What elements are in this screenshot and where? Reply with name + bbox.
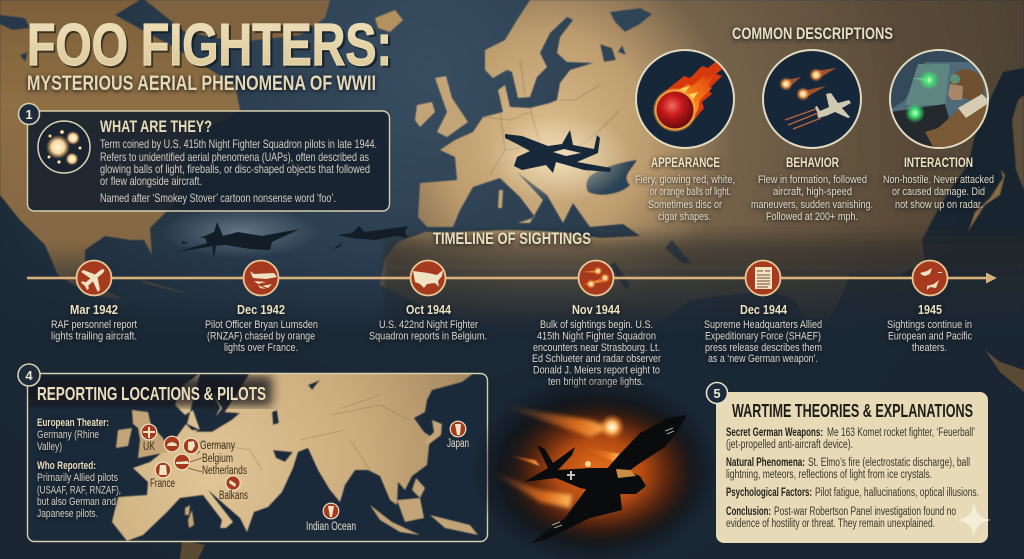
theories text: (jet-propelled anti-aircraft device). — [726, 439, 853, 451]
Mar 1942 event: lights trailing aircraft. — [51, 330, 137, 342]
interaction text: or caused damage. Did — [892, 186, 985, 198]
icon: plane — [76, 260, 112, 296]
title: FOO FIGHTERS: — [28, 14, 394, 80]
Oct 1944 event: Squadron reports in Belgium. — [369, 330, 487, 342]
map labels — [143, 438, 469, 533]
theories text: Conclusion: — [726, 506, 771, 518]
badge 1: 1 — [25, 107, 33, 122]
side text: Japanese pilots. — [37, 508, 98, 520]
subtitle: MYSTERIOUS AERIAL PHENOMENA OF WWII — [27, 71, 376, 95]
map labels: Belgium — [202, 453, 233, 465]
Nov 1944 event: ten bright orange lights. — [548, 376, 644, 388]
descriptions text — [635, 155, 994, 223]
theories text: Natural Phenomena: — [726, 457, 805, 469]
side text: European Theater: — [37, 417, 109, 429]
theories text: Post-war Robertson Panel investigation found no — [774, 506, 956, 518]
behavior text: BEHAVIOR — [786, 155, 839, 170]
Dec 1944 event: Dec 1944 — [740, 302, 788, 317]
map leader lines — [188, 451, 202, 472]
icon: press release — [755, 267, 772, 289]
body text: Refers to unidentified aerial phenomena (UAPs), often described as — [100, 151, 369, 164]
Dec 1944 event: press release describes them — [705, 342, 822, 354]
Dec 1942 event: (RNZAF) chased by orange — [207, 330, 315, 342]
map labels: UK — [143, 441, 155, 453]
theories text: lightning, meteors, reflections of light from ice crystals. — [726, 469, 932, 481]
body text: or flew alongside aircraft. — [100, 175, 202, 188]
interaction text: INTERACTION — [904, 155, 973, 170]
Nov 1944 event: Bulk of sightings begin. U.S. — [540, 319, 653, 331]
body text: Term coined by U.S. 415th Night Fighter Squadron pilots in late 1944. — [100, 138, 377, 151]
1945 event: 1945 — [918, 302, 942, 317]
map labels: Japan — [447, 438, 469, 450]
body text: Named after ‘Smokey Stover’ cartoon nonsense word ‘foo’. — [100, 192, 336, 205]
side text — [37, 417, 121, 520]
interaction text: Non-hostile. Never attacked — [883, 174, 994, 186]
Mar 1942 event: Mar 1942 — [70, 302, 118, 317]
Dec 1942 event — [205, 302, 318, 354]
appearance text — [635, 155, 735, 223]
Dec 1944 event — [704, 302, 822, 365]
side text: Germany (Rhine — [37, 429, 99, 441]
Dec 1942 event: Pilot Officer Bryan Lumsden — [205, 319, 318, 331]
side text: Primarily Allied pilots — [37, 472, 118, 484]
1945 event: European and Pacific — [888, 330, 972, 342]
interaction text — [883, 155, 994, 211]
theories text — [726, 427, 979, 530]
appearance text: Sometimes disc or — [648, 199, 722, 211]
badge 5: 5 — [713, 386, 721, 401]
behavior text: aircraft, high-speed — [773, 186, 852, 198]
icon: maps — [920, 268, 942, 290]
appearance text: or orange balls of light. — [650, 186, 731, 198]
badge 4 — [18, 364, 40, 386]
icon: glowing orbs — [38, 121, 90, 173]
heading: REPORTING LOCATIONS & PILOTS — [37, 384, 266, 404]
timeline node: 1945 — [912, 260, 948, 296]
badge 4: 4 — [25, 368, 33, 383]
icon: behavior formation — [763, 50, 861, 148]
icon: USA map — [413, 270, 443, 288]
timeline arrow — [27, 272, 997, 284]
side text: Valley) — [37, 441, 62, 453]
illustration: plane with fireballs — [470, 375, 720, 559]
map labels: Germany — [200, 440, 235, 452]
behavior text — [751, 155, 873, 223]
timeline node: Dec 1944 — [746, 260, 780, 296]
Oct 1944 event — [369, 302, 487, 342]
Nov 1944 event: Ed Schlueter and radar observer — [532, 353, 661, 365]
1945 event: Sightings continue in — [887, 319, 972, 331]
silhouette bombers — [160, 206, 408, 258]
theories text: evidence of hostility or threat. They remain unexplained. — [726, 518, 935, 530]
title: FOO FIGHTERS: — [27, 12, 392, 78]
panel 1: what are they — [18, 104, 390, 211]
panel 5: wartime theories — [706, 382, 988, 543]
icon: interaction cockpit — [890, 50, 990, 150]
heading: WHAT ARE THEY? — [100, 118, 212, 136]
Dec 1944 event: Supreme Headquarters Allied — [704, 319, 822, 331]
icon: fireballs — [582, 266, 610, 289]
panel 4: reporting locations and pilots — [18, 364, 488, 542]
theories text: St. Elmo’s fire (electrostatic discharge), ball — [808, 457, 970, 469]
timeline node: Dec 1942 — [244, 260, 278, 296]
icon: plane and lights — [250, 271, 277, 289]
timeline node: Nov 1944 — [578, 260, 614, 296]
Mar 1942 event — [51, 302, 138, 342]
body text: glowing balls of light, fireballs, or disc-shaped objects that followed — [100, 163, 370, 176]
Dec 1944 event: Expeditionary Force (SHAEF) — [705, 330, 821, 342]
lower wing — [531, 484, 622, 543]
body text — [100, 138, 377, 205]
upper wing — [606, 415, 687, 474]
Nov 1944 event: Nov 1944 — [572, 302, 621, 317]
Dec 1942 event: Dec 1942 — [237, 302, 285, 317]
behavior text: maneuvers, sudden vanishing. — [751, 199, 873, 211]
side text: Who Reported: — [37, 460, 96, 472]
1945 event — [887, 302, 972, 354]
timeline text — [51, 302, 972, 388]
icon: sparkle — [957, 502, 991, 537]
theories text: Secret German Weapons: — [726, 427, 823, 439]
timeline node: Oct 1944 — [410, 260, 446, 296]
Nov 1944 event: encounters near Strasbourg. Lt. — [533, 342, 660, 354]
Dec 1942 event: lights over France. — [224, 342, 298, 354]
behavior text: Followed at 200+ mph. — [766, 211, 858, 223]
appearance text: APPEARANCE — [651, 155, 720, 170]
map of Eurasia — [22, 373, 478, 541]
fuselage and tail — [524, 445, 646, 494]
interaction text: not show up on radar. — [895, 199, 983, 211]
map labels: France — [150, 478, 175, 490]
Nov 1944 event: 415th Night Fighter Squadron — [537, 330, 656, 342]
Nov 1944 event — [532, 302, 661, 388]
Oct 1944 event: Oct 1944 — [406, 302, 452, 317]
Dec 1944 event: as a ‘new German weapon’. — [708, 353, 818, 365]
side text: (USAAF, RAF, RNZAF), — [37, 484, 121, 496]
Nov 1944 event: Donald J. Meiers report eight to — [533, 364, 660, 376]
badge 1 — [18, 104, 40, 124]
aircraft silhouette over Europe — [488, 114, 632, 202]
map labels: Indian Ocean — [306, 521, 356, 533]
icon: appearance fireball — [636, 50, 736, 148]
theories text: Psychological Factors: — [726, 487, 812, 499]
map markers — [141, 421, 466, 519]
behavior text: Flew in formation, followed — [758, 174, 867, 186]
timeline heading: TIMELINE OF SIGHTINGS — [433, 229, 591, 248]
timeline node: Mar 1942 — [76, 260, 112, 296]
map labels: Balkans — [219, 490, 248, 502]
common descriptions heading: COMMON DESCRIPTIONS — [732, 24, 893, 43]
appearance text: cigar shapes. — [658, 211, 711, 223]
1945 event: theaters. — [912, 342, 947, 354]
badge 5 — [706, 382, 728, 404]
appearance text: Fiery, glowing red, white, — [635, 174, 735, 186]
Mar 1942 event: RAF personnel report — [51, 319, 138, 331]
map labels: Netherlands — [202, 465, 247, 477]
side text: but also German and — [37, 496, 116, 508]
Oct 1944 event: U.S. 422nd Night Fighter — [379, 319, 478, 331]
